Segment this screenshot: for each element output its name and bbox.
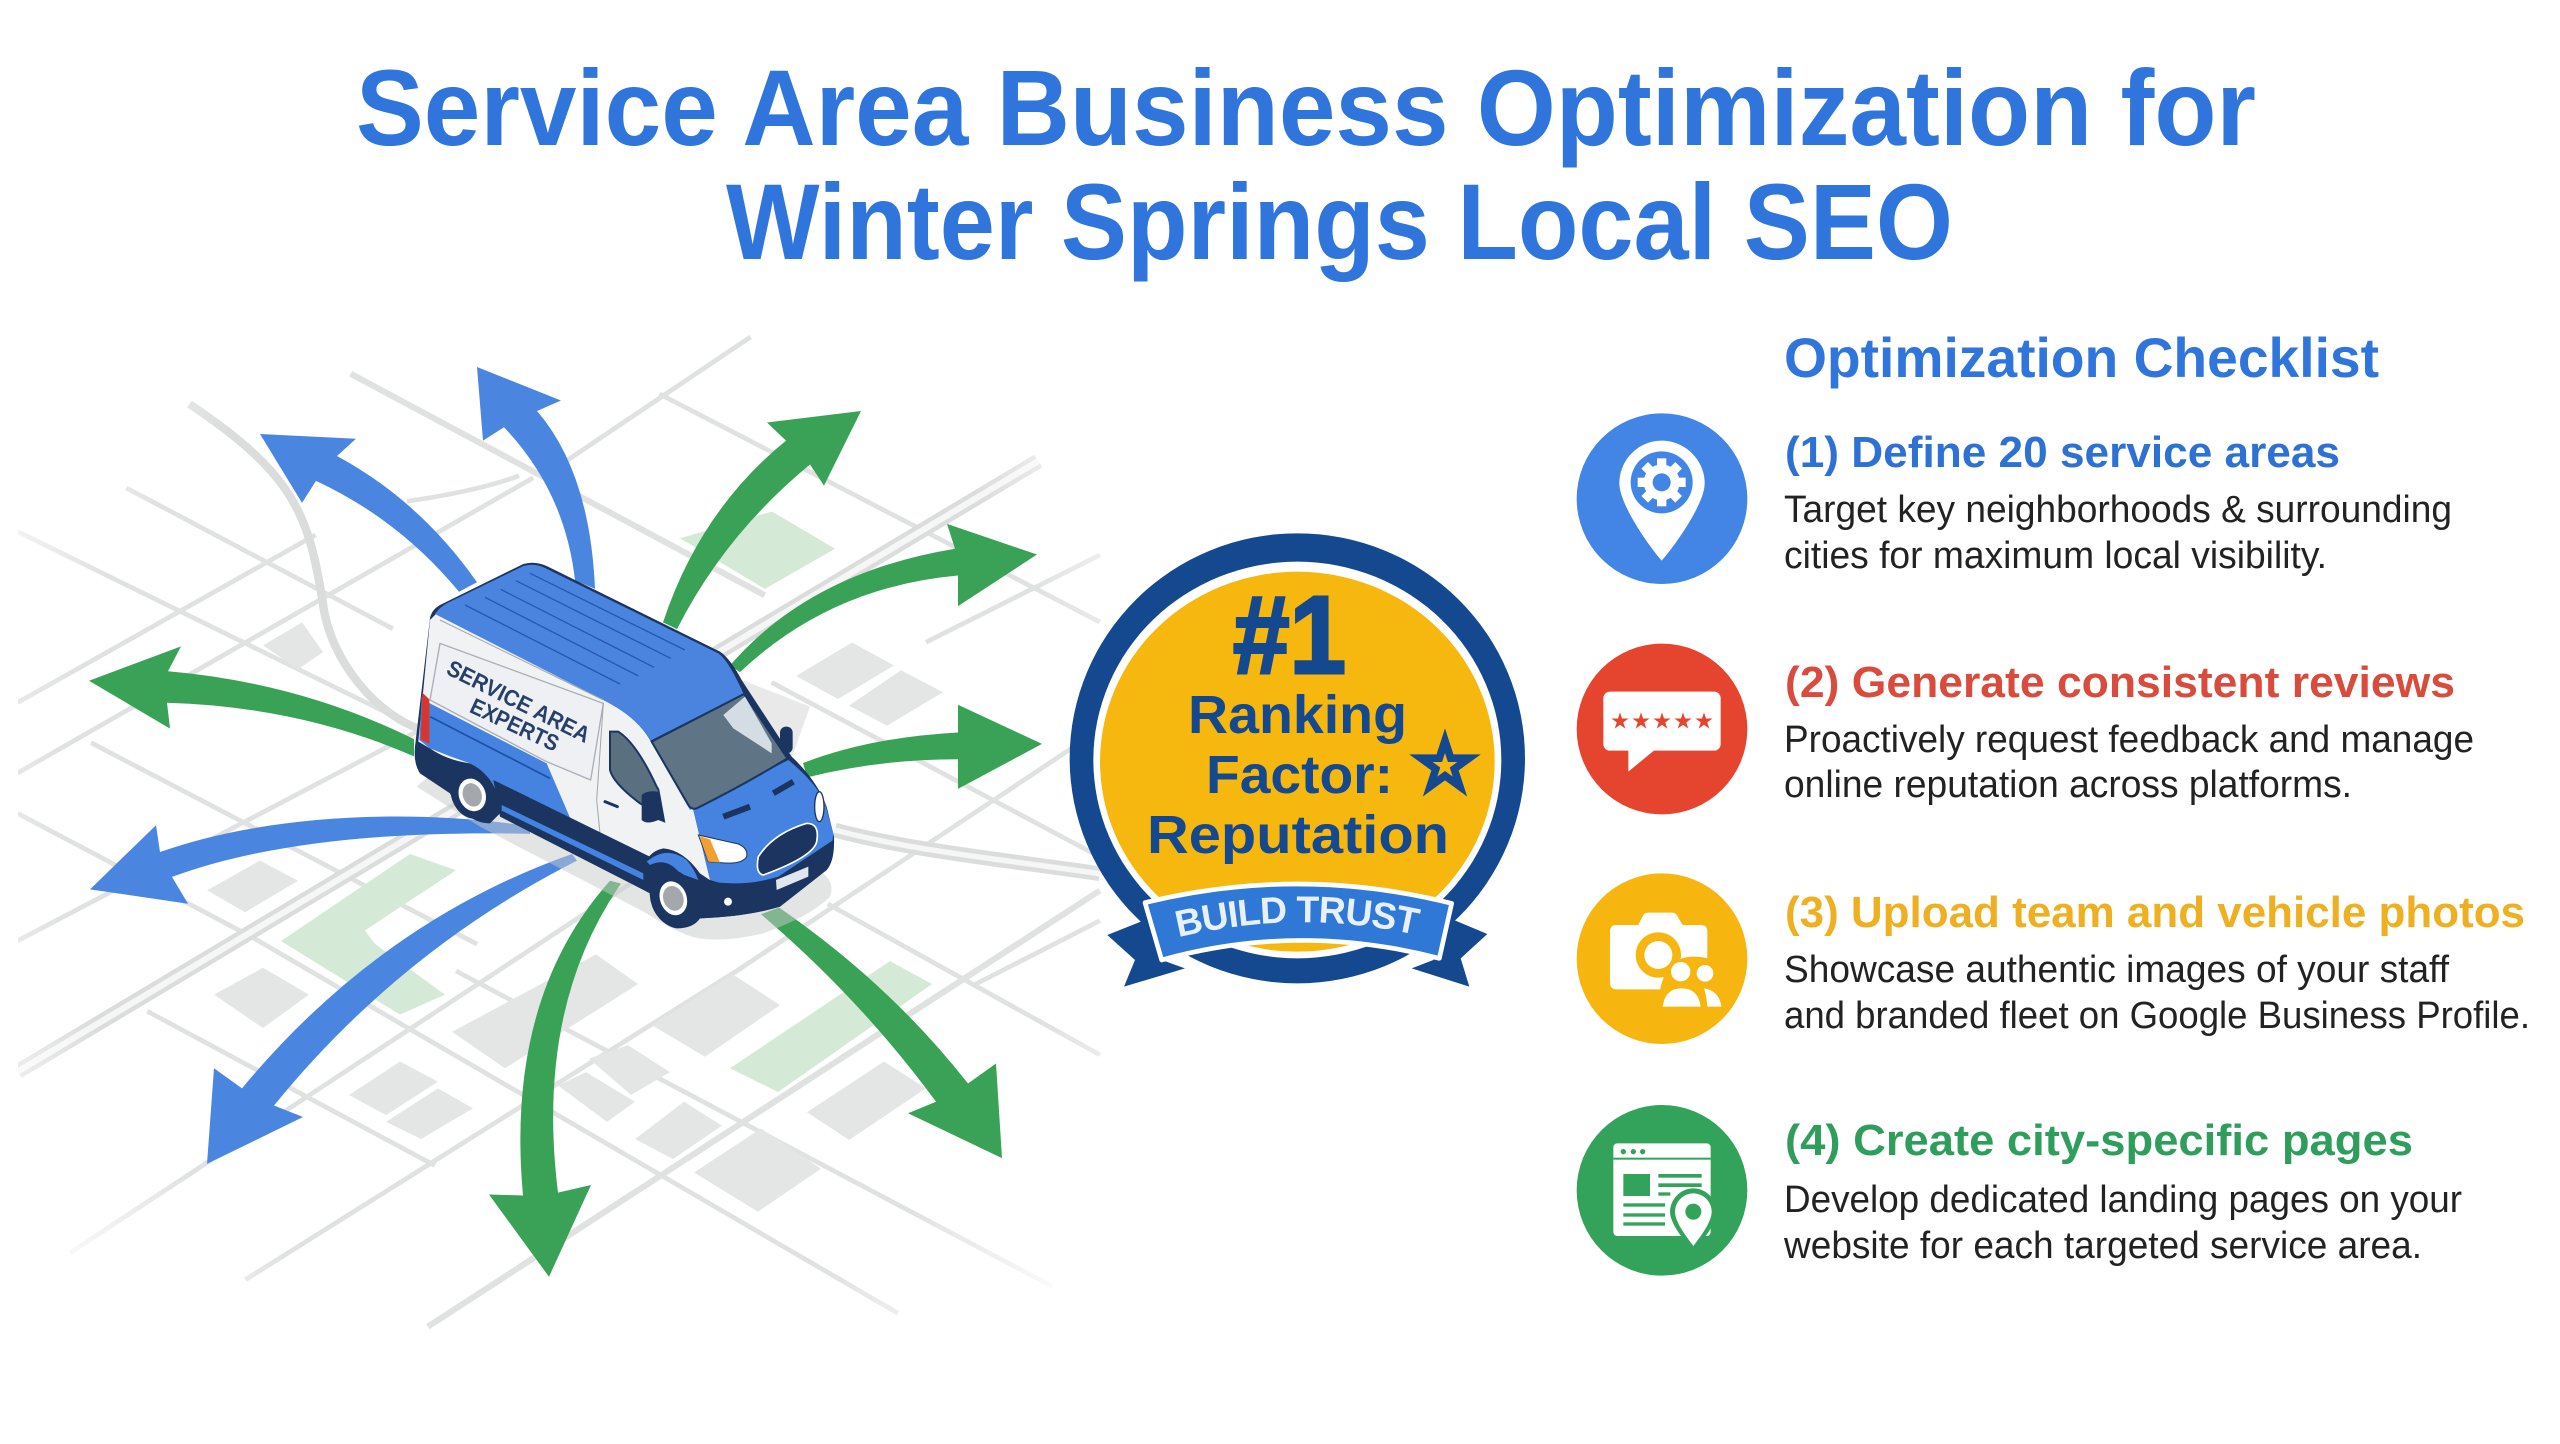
badge text: Ranking [1188,685,1407,745]
item 1 text: cities for maximum local visibility. [1784,535,2327,577]
banner text [1175,896,1421,937]
item 3 text: (3) Upload team and vehicle photos [1785,888,2525,937]
checklist heading: Optimization Checklist [1784,326,2379,389]
checklist item 2 [1577,644,2474,814]
icon: location pin with gear [1577,413,1747,584]
item 2 text: Proactively request feedback and manage [1784,719,2474,761]
badge text: #1 [1233,574,1346,697]
service area arrows [89,367,1042,1277]
arrow: blue lower left [207,854,577,1164]
banner text: BUILD TRUST [1175,896,1421,937]
arrow: green bottom [489,881,621,1277]
item 4 text: (4) Create city-specific pages [1785,1116,2413,1165]
ribbon tails [1107,918,1487,987]
arrow: blue top [477,367,595,589]
service van [415,563,834,940]
item 3 text: and branded fleet on Google Business Profile. [1784,995,2530,1037]
banner ribbon [1145,884,1452,960]
title: Service Area Business Optimization for [356,47,2256,168]
title [356,47,2256,282]
checklist item 3 [1577,873,2530,1044]
item 3 text: Showcase authentic images of your staff [1784,949,2449,991]
checklist item 4 [1577,1105,2462,1276]
item 4 text: Develop dedicated landing pages on your [1784,1179,2462,1221]
badge text: Factor: [1206,745,1393,805]
arrow: green left [89,646,414,756]
item 4 text [1783,1116,2462,1267]
item 2 text [1784,658,2474,806]
item 1 text: Target key neighborhoods & surrounding [1784,489,2452,531]
arrow: blue left [90,817,530,904]
van side text: SERVICE AREA [443,655,595,748]
item 2 text: (2) Generate consistent reviews [1785,658,2455,707]
item 3 text [1784,888,2530,1037]
van side text: EXPERTS [466,693,563,756]
item 2 text: online reputation across platforms. [1784,764,2352,806]
checklist item 1 [1577,413,2452,584]
item 1 text [1784,428,2452,577]
icon: camera and team [1577,873,1747,1044]
arrow: green right upper [730,524,1037,672]
badge: #1 ranking factor reputation [1070,533,1525,987]
title: Winter Springs Local SEO [726,161,1953,282]
badge text [1147,574,1449,865]
arrow: green right [803,705,1042,789]
panel: service area map illustration [18,337,1100,1327]
arrow: blue upper left [260,434,477,592]
badge text: Reputation [1147,805,1449,865]
arrow: green top right [663,411,861,629]
icon: web page with pin [1577,1105,1747,1276]
icon: review speech bubble [1577,644,1747,814]
star icon [1421,741,1469,786]
item 1 text: (1) Define 20 service areas [1785,428,2340,477]
arrow: green lower right [761,908,1002,1158]
item 4 text: website for each targeted service area. [1783,1225,2422,1267]
city street map [18,337,1100,1327]
